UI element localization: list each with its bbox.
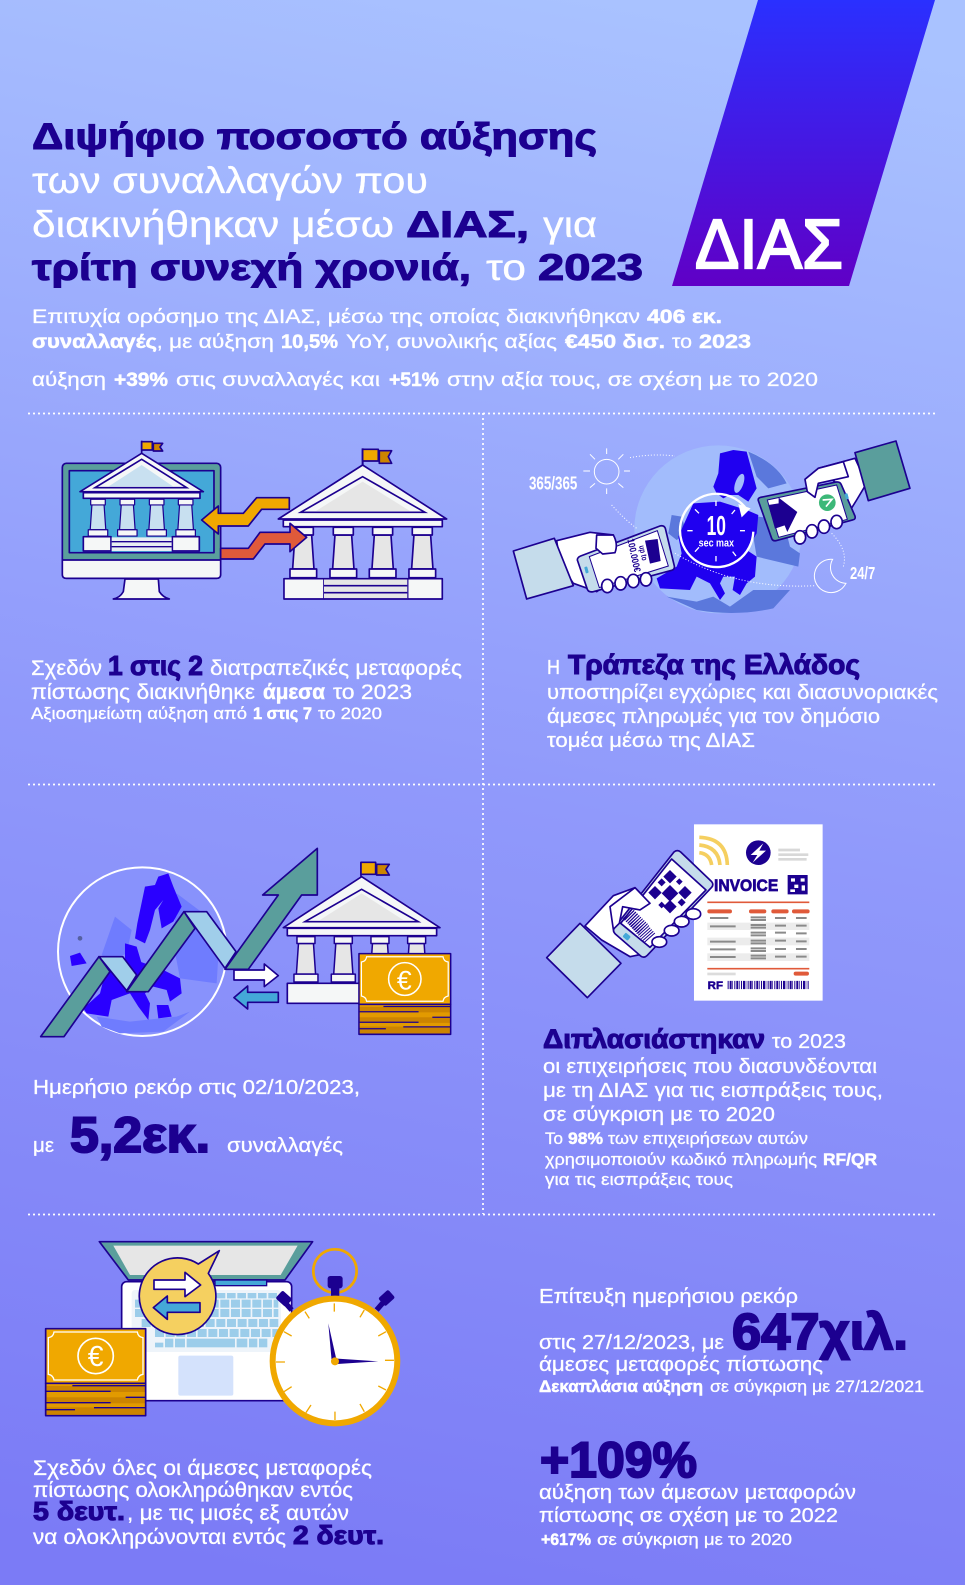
timer: 10 sec max: 10 (707, 510, 726, 541)
text: completed within 5 sec: 5 δευτ. (33, 1496, 125, 1526)
banknote stack: € (88, 1341, 104, 1373)
title: Διψήφιο ποσοστό αύξησης (32, 116, 597, 157)
title (32, 116, 643, 288)
intro text: συναλλαγές (32, 331, 157, 353)
left hand with phone (513, 526, 674, 599)
text: 1 in 2 interbank transfers: άμεσα (263, 681, 325, 704)
text: businesses doubled: με τη ΔΙΑΣ για τις εισπράξεις τους, (543, 1079, 883, 1102)
intro text: στις συναλλαγές και (176, 369, 380, 391)
timer: 10 sec max (680, 494, 753, 567)
text: 1 in 2 interbank transfers: το 2020 (318, 705, 382, 723)
illustration: Europe, growth arrow, bank and banknote (41, 848, 451, 1037)
text: completed within 5 sec: πίστωσης ολοκληρώθηκαν εντός (33, 1479, 353, 1502)
title: το (486, 247, 526, 288)
text: businesses doubled (543, 1024, 883, 1189)
text: 1 in 2 interbank transfers: πίστωσης διακινήθηκε (31, 681, 255, 704)
title: ΔΙΑΣ, (406, 204, 529, 245)
text: daily record 5.2m: 5,2εκ. (70, 1107, 210, 1163)
arrow: blue (234, 986, 278, 1009)
intro text: Επιτυχία ορόσημο της ΔΙΑΣ, μέσω της οποίας διακινήθηκαν (32, 306, 640, 328)
text: businesses doubled: Διπλασιάστηκαν (543, 1024, 765, 1054)
text: daily record 5.2m: Ημερήσιο ρεκόρ στις 02/10/2023, (33, 1076, 360, 1099)
text: daily record 5.2m: με (33, 1134, 54, 1157)
dotted connectors (612, 455, 844, 586)
laptop (99, 1242, 313, 1401)
intro text: 2023 (699, 331, 751, 353)
label: 365/365 with sun: 365/365 (529, 472, 577, 493)
bank (283, 862, 440, 1003)
growth arrow (41, 848, 317, 1037)
text: 1 in 2 interbank transfers: 1 στις 7 (253, 705, 312, 723)
text: +109%: πίστωσης σε σχέση με το 2022 (539, 1504, 838, 1527)
text: businesses doubled: χρησιμοποιούν κωδικό πληρωμής (545, 1150, 817, 1169)
text: businesses doubled: το 2023 (772, 1030, 846, 1053)
text: completed within 5 sec: να ολοκληρώνονται εντός (33, 1526, 286, 1549)
text: daily record 647k (539, 1285, 924, 1396)
text: businesses doubled: 98% (568, 1129, 603, 1148)
text: businesses doubled: για τις εισπράξεις τους (545, 1170, 733, 1189)
banknote stack (46, 1329, 146, 1416)
text: 1 in 2 interbank transfers: Αξιοσημείωτη αύξηση από (31, 705, 247, 723)
text: Bank of Greece: άμεσες πληρωμές για τον δημόσιο (547, 705, 880, 728)
text: daily record 647k: άμεσες μεταφορές πίστωσης (539, 1353, 823, 1376)
bank right (278, 448, 447, 599)
text: daily record 5.2m: συναλλαγές (227, 1134, 343, 1157)
invoice: RF (708, 980, 723, 992)
illustration: Europe globe, instant payment between phones (513, 441, 910, 613)
invoice (694, 824, 823, 1001)
stopwatch (273, 1249, 397, 1423)
label: 365/365 with sun (529, 448, 630, 494)
invoice: INVOICE (714, 876, 778, 895)
timer: 10 sec max: sec max (699, 537, 734, 549)
text: completed within 5 sec: 2 δευτ. (293, 1520, 384, 1550)
text: 1 in 2 interbank transfers: Σχεδόν (31, 657, 102, 680)
logo banner: ΔΙΑΣ (672, 0, 935, 286)
text: +109%: +109% (540, 1432, 697, 1488)
monitor (62, 463, 221, 599)
arrow: red (221, 523, 307, 559)
text: Bank of Greece: υποστηρίζει εγχώριες και διασυνοριακές (547, 681, 938, 704)
illustration: banks exchanging transfers (62, 441, 447, 599)
intro text: με αύξηση (169, 331, 274, 353)
banknote stack: € (397, 965, 412, 995)
text: Bank of Greece (547, 649, 938, 752)
text: daily record 647k: 647χιλ. (732, 1303, 908, 1360)
text: daily record 647k: Δεκαπλάσια αύξηση (539, 1378, 703, 1396)
text: +109%: σε σύγκριση με το 2020 (597, 1531, 792, 1549)
right hand with phone (758, 441, 910, 544)
text: Bank of Greece: Τράπεζα της Ελλάδος (568, 649, 860, 680)
arrow: yellow (202, 498, 289, 534)
intro text: +39% (114, 369, 168, 391)
globe (634, 445, 802, 613)
text: businesses doubled: των επιχειρήσεων αυτών (608, 1129, 808, 1148)
title: για (543, 204, 597, 245)
logo banner: ΔΙΑΣ: ΔΙΑΣ (695, 205, 843, 283)
text: +109%: αύξηση των άμεσων μεταφορών (539, 1481, 856, 1504)
text: 1 in 2 interbank transfers (31, 650, 462, 723)
title: των συναλλαγών που (32, 160, 428, 201)
intro text: +51% (389, 369, 439, 391)
label: 24/7 with moon: 24/7 (850, 563, 875, 583)
text: daily record 647k: στις 27/12/2023, με (539, 1331, 724, 1354)
speech bubble with transfer arrows (139, 1251, 219, 1335)
intro text: το (672, 331, 692, 353)
left hand with phone: up to (637, 544, 650, 561)
intro text: στην αξία τους, σε σχέση με το 2020 (447, 369, 818, 391)
illustration: invoice with QR payment (547, 824, 823, 1001)
text: daily record 5.2m (33, 1076, 360, 1163)
hand with phone scanning QR (547, 851, 713, 998)
bank on monitor (80, 441, 203, 551)
intro text: , (157, 331, 162, 353)
intro text: 10,5% (281, 331, 338, 353)
intro text: αύξηση (32, 369, 106, 391)
globe (58, 867, 227, 1036)
illustration: laptop, banknote and stopwatch (46, 1242, 397, 1423)
text: Bank of Greece: Η (547, 657, 560, 679)
text: completed within 5 sec (33, 1457, 384, 1550)
text: businesses doubled: Το (545, 1129, 563, 1148)
intro text (32, 306, 818, 391)
text: +109%: +617% (541, 1531, 591, 1549)
left hand with phone: 100.000€ (624, 538, 642, 574)
intro text: €450 δισ. (565, 331, 665, 353)
text: completed within 5 sec: Σχεδόν όλες οι άμεσες μεταφορές (33, 1457, 372, 1480)
label: 24/7 with moon (814, 559, 875, 593)
intro text: 406 εκ. (647, 306, 722, 328)
title: διακινήθηκαν μέσω (32, 204, 394, 245)
text: businesses doubled: σε σύγκριση με το 2020 (543, 1103, 775, 1126)
text: daily record 647k: Επίτευξη ημερήσιου ρεκόρ (539, 1285, 798, 1308)
text: Bank of Greece: τομέα μέσω της ΔΙΑΣ (547, 729, 755, 752)
intro text: YoY, συνολικής αξίας (346, 331, 557, 353)
text: +109% (539, 1432, 856, 1549)
title: 2023 (538, 247, 643, 288)
arrow: white (234, 964, 278, 987)
text: businesses doubled: RF/QR (823, 1150, 877, 1169)
text: businesses doubled: οι επιχειρήσεις που διασυνδέονται (543, 1055, 877, 1078)
text: daily record 647k: σε σύγκριση με 27/12/2021 (710, 1378, 924, 1396)
text: completed within 5 sec: , με τις μισές εξ αυτών (127, 1502, 349, 1525)
text: 1 in 2 interbank transfers: το 2023 (333, 681, 412, 704)
banknote stack (359, 954, 451, 1034)
text: 1 in 2 interbank transfers: διατραπεζικές μεταφορές (210, 657, 462, 680)
text: 1 in 2 interbank transfers: 1 στις 2 (108, 650, 203, 681)
title: τρίτη συνεχή χρονιά, (32, 247, 471, 288)
